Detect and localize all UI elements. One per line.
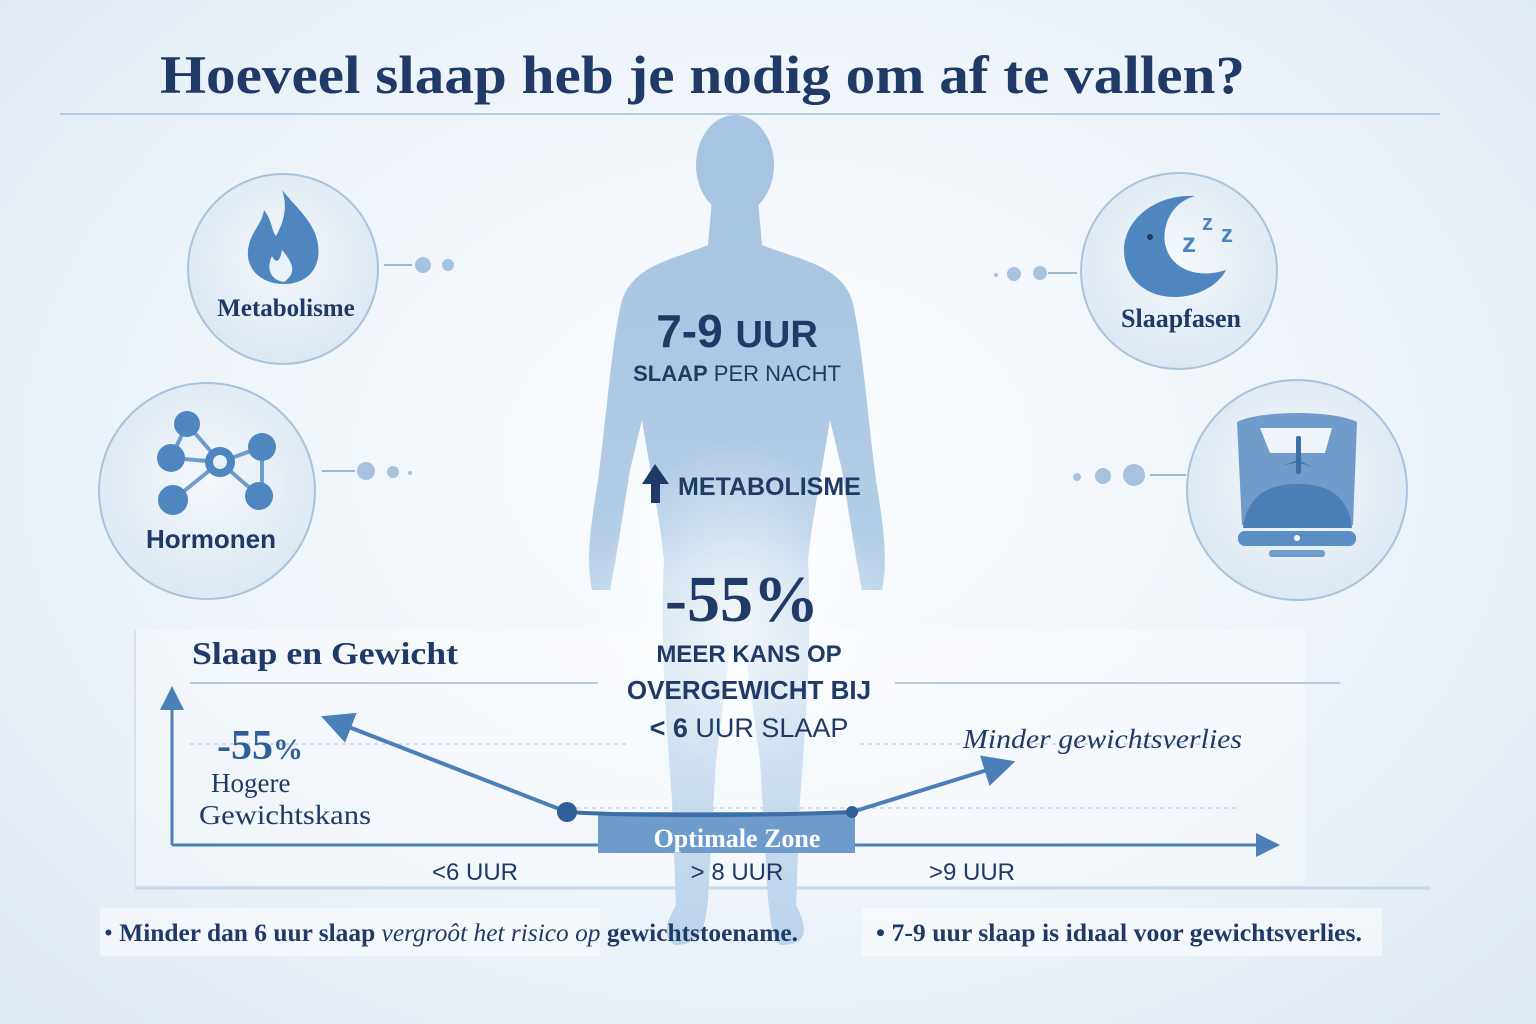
chart: slaap en gewicht [172, 635, 1340, 886]
panel: metabolisme: Metabolisme [217, 295, 355, 322]
panel: hormonen [99, 383, 412, 599]
curve [336, 722, 567, 812]
chart: slaap en gewicht: Gewichtskans [199, 800, 371, 830]
center stat: -55%: MEER KANS OP [656, 641, 842, 668]
panel: slaapfasen: Slaapfasen [1121, 304, 1241, 333]
icon: scale [1237, 413, 1357, 525]
center stat: -55%: -55% [665, 563, 819, 636]
axes [170, 698, 174, 845]
chart: slaap en gewicht: Optimale Zone [654, 824, 820, 853]
title: Hoeveel slaap heb je nodig om af te vallen? [160, 45, 1245, 105]
icon: molecule [171, 424, 262, 500]
footer notes: • Minder dan 6 uur slaap vergroôt het risico op gewichtstoename. [104, 920, 798, 947]
center stat: -55%: OVERGEWICHT BIJ [627, 675, 871, 705]
footer notes [104, 920, 1362, 947]
left annotation: -55% [217, 723, 303, 769]
chart: slaap en gewicht: > 8 UUR [691, 859, 783, 886]
chart: slaap en gewicht: >9 UUR [929, 859, 1015, 886]
center stat: 7-9 uur [633, 305, 841, 386]
center stat: 7-9 uur: 7-9 UUR [656, 305, 818, 357]
panel: slaapfasen: z [1182, 227, 1196, 258]
chart panel background [100, 630, 1430, 956]
metabolism up arrow [642, 464, 861, 503]
icon: moon with zzz [1124, 196, 1226, 297]
center stat: -55%: < 6 UUR SLAAP [650, 713, 848, 743]
optimal zone [598, 812, 855, 853]
panel: slaapfasen [994, 173, 1277, 369]
panel: slaapfasen: z [1202, 210, 1213, 235]
panel: weegschaal [1073, 380, 1407, 600]
chart: slaap en gewicht: Slaap en Gewicht [192, 635, 458, 671]
footer notes: • 7-9 uur slaap is idıaal voor gewichtsverlies. [876, 920, 1362, 947]
chart: slaap en gewicht: Hogere [211, 768, 290, 798]
panel: hormonen: Hormonen [146, 524, 276, 554]
center stat: -55% [627, 563, 871, 743]
metabolism up arrow: METABOLISME [678, 473, 861, 501]
body silhouette [589, 115, 885, 945]
right annotation: Minder gewichtsverlies [962, 724, 1242, 754]
center stat: 7-9 uur: SLAAP PER NACHT [633, 361, 841, 386]
panel: slaapfasen: z [1221, 221, 1233, 248]
icon: flame [248, 190, 318, 284]
panel: metabolisme [188, 174, 454, 364]
x labels: <6 UUR [432, 859, 518, 886]
